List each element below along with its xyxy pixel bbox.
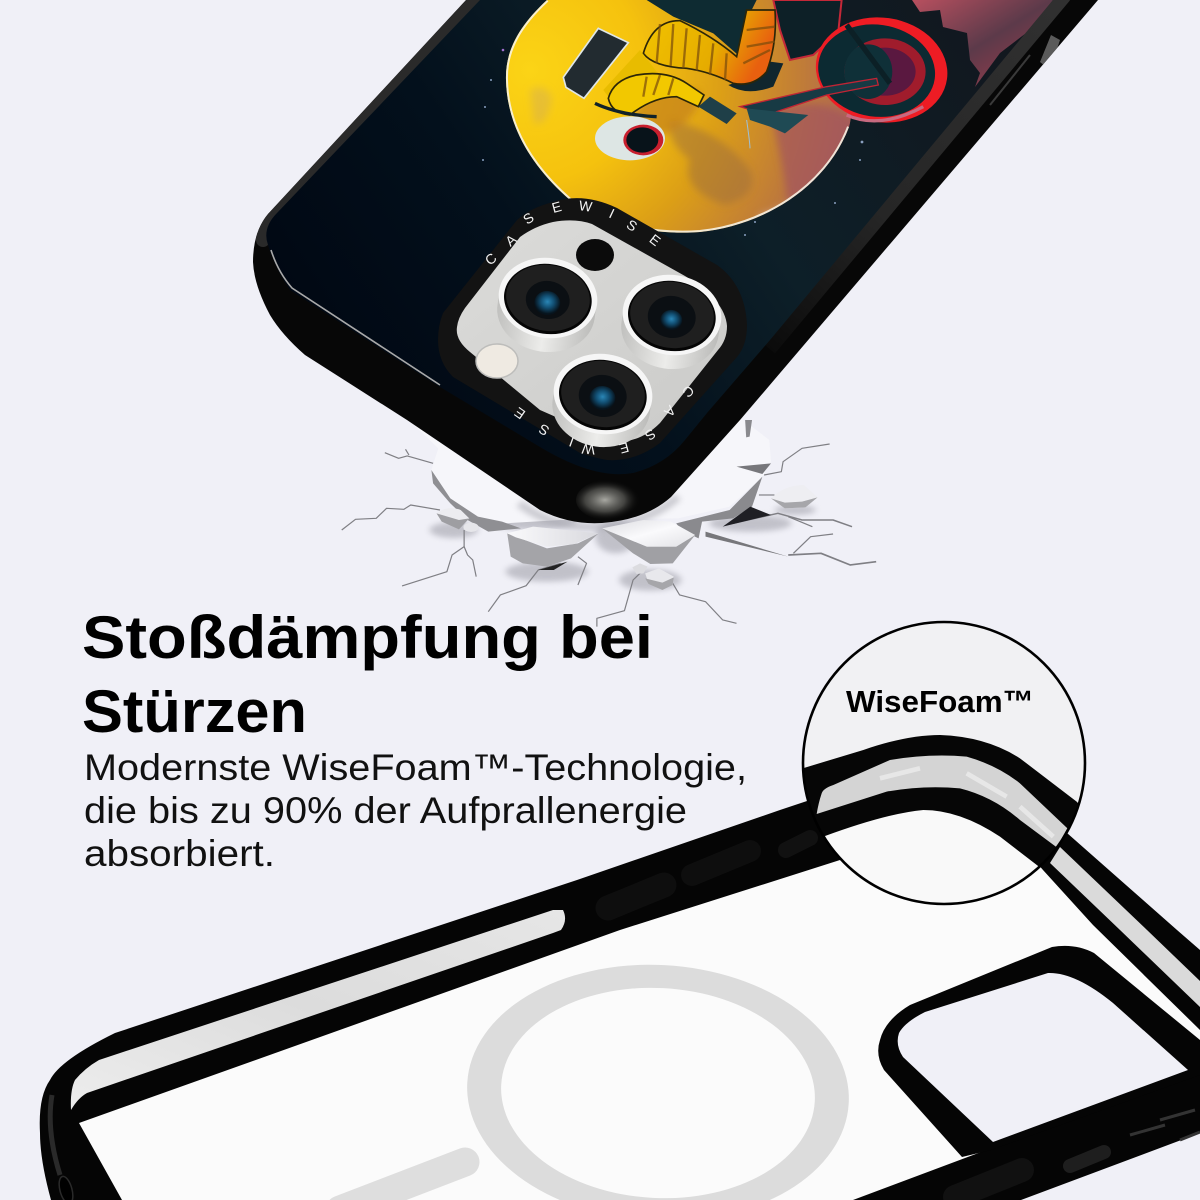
rear wheel: [816, 17, 948, 123]
magnetic ring: [461, 955, 855, 1200]
coral cloud: [912, 0, 1053, 87]
centre fragment: [602, 520, 695, 564]
heading: Stoßdämpfung bei: [82, 604, 653, 671]
magnified frame detail: [804, 735, 1078, 866]
CASEWISE ring text bottom: CASEWISE: [511, 382, 698, 458]
astronaut rider: [563, 0, 954, 160]
camera cut-out frame: [878, 946, 1200, 1157]
small wall chips: [437, 485, 818, 590]
stars: [482, 49, 901, 236]
bike frame: [740, 78, 878, 115]
magnifier outline: [803, 622, 1085, 904]
dark under-suit line: [595, 103, 657, 117]
suit folds: [643, 24, 775, 97]
gloves: [698, 97, 737, 124]
lens 1: [491, 252, 603, 358]
heading: [82, 604, 653, 745]
camera plate: [457, 220, 727, 441]
raised wall plate: [409, 420, 771, 523]
sensor hole: [576, 239, 614, 271]
clear back panel: [79, 820, 1200, 1200]
lower edge glare: [1130, 1110, 1200, 1140]
foam slot right side: [1050, 847, 1200, 1007]
flash: [476, 344, 518, 378]
suit: [643, 10, 775, 84]
bottom phone case interior: [40, 775, 1200, 1200]
lower edge button: [955, 1170, 1022, 1197]
corner speaker hole: [57, 1175, 75, 1200]
heading: Stürzen: [82, 678, 307, 745]
body text: die bis zu 90% der Aufprallenergie: [84, 790, 687, 831]
case outer bumper: [253, 0, 1098, 523]
body text: Modernste WiseFoam™-Technologie,: [84, 747, 747, 788]
helmet: [595, 116, 665, 160]
left fragment: [507, 527, 599, 567]
bike rear: [773, 0, 842, 60]
crack edges: [431, 420, 788, 570]
camera bumper: [438, 198, 747, 460]
moon: [506, 0, 860, 240]
top phone with printed case: [250, 0, 1100, 523]
body text: [84, 747, 747, 874]
magnetic pill: [340, 1162, 465, 1200]
magnifier label: WiseFoam™: [846, 684, 1034, 719]
camera island: [438, 197, 747, 460]
lens 2: [615, 269, 727, 375]
backpack: [563, 28, 628, 98]
cracked wall impact: [342, 420, 876, 627]
side button two: [692, 851, 750, 875]
foam slot long side: [71, 910, 565, 1110]
side button one: [608, 885, 664, 908]
corner gloss: [50, 1095, 60, 1175]
glossy bumper highlight: [263, 0, 1060, 521]
phone contact shadow: [519, 497, 678, 527]
black frame: [40, 775, 1200, 1200]
rider dark body: [647, 0, 757, 57]
printed back artwork: [266, 0, 1052, 474]
body text: absorbiert.: [84, 833, 275, 874]
CASEWISE ring text top: CASEWISE: [482, 197, 664, 268]
crack lines: [342, 444, 876, 627]
seat and shadow: [728, 62, 783, 91]
magnifier fill: [803, 622, 1085, 904]
impact shadow: [430, 505, 816, 591]
side port: [786, 838, 810, 850]
magnifier callout: [802, 620, 1086, 906]
camera cut-out opening: [898, 973, 1188, 1142]
lower edge port: [1070, 1152, 1104, 1166]
lens 3: [547, 348, 658, 453]
rim highlight line: [271, 250, 440, 385]
